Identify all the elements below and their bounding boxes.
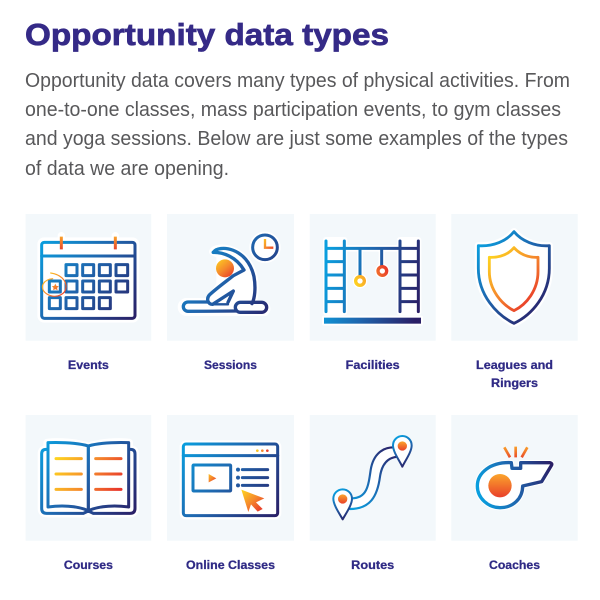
panel: online classes [167, 415, 294, 541]
label: Sessions: Sessions [204, 360, 257, 372]
intro paragraph: Opportunity data covers many types of physical activities. From [25, 70, 570, 92]
label: Facilities: Facilities [346, 360, 400, 372]
icon: whistle [477, 447, 552, 508]
intro paragraph: one-to-one classes, mass participation events, to gym classes [25, 99, 561, 121]
label: Coaches: Coaches [489, 560, 540, 572]
panel: routes [310, 415, 436, 541]
intro paragraph: of data we are opening. [25, 158, 229, 180]
label: Leagues and Ringers: Ringers [491, 378, 538, 390]
panel: facilities [310, 214, 436, 341]
label: Leagues and Ringers: Leagues and [476, 360, 553, 372]
icon: climbing frame [324, 240, 421, 324]
icon: route with two pins [333, 436, 412, 519]
panel: sessions [167, 214, 294, 341]
label: Routes: Routes [351, 560, 394, 572]
icon: open book [42, 442, 135, 513]
intro paragraph: and yoga sessions. Below are just some examples of the types [25, 128, 568, 150]
title: Opportunity data types [25, 18, 389, 52]
panel: events [26, 214, 151, 341]
label: Online Classes: Online Classes [186, 560, 275, 572]
panel: courses [26, 415, 151, 541]
icon: stretching figure with clock [181, 235, 278, 312]
panel: coaches [451, 415, 578, 541]
icon: shield [478, 232, 549, 323]
label: Courses: Courses [64, 560, 113, 572]
icon: browser window with video [183, 444, 278, 516]
label: Events: Events [68, 360, 109, 372]
label: Leagues and Ringers [476, 360, 553, 390]
icon: calendar [42, 236, 135, 318]
intro paragraph [25, 70, 570, 180]
panel: leagues and ringers [451, 214, 578, 341]
